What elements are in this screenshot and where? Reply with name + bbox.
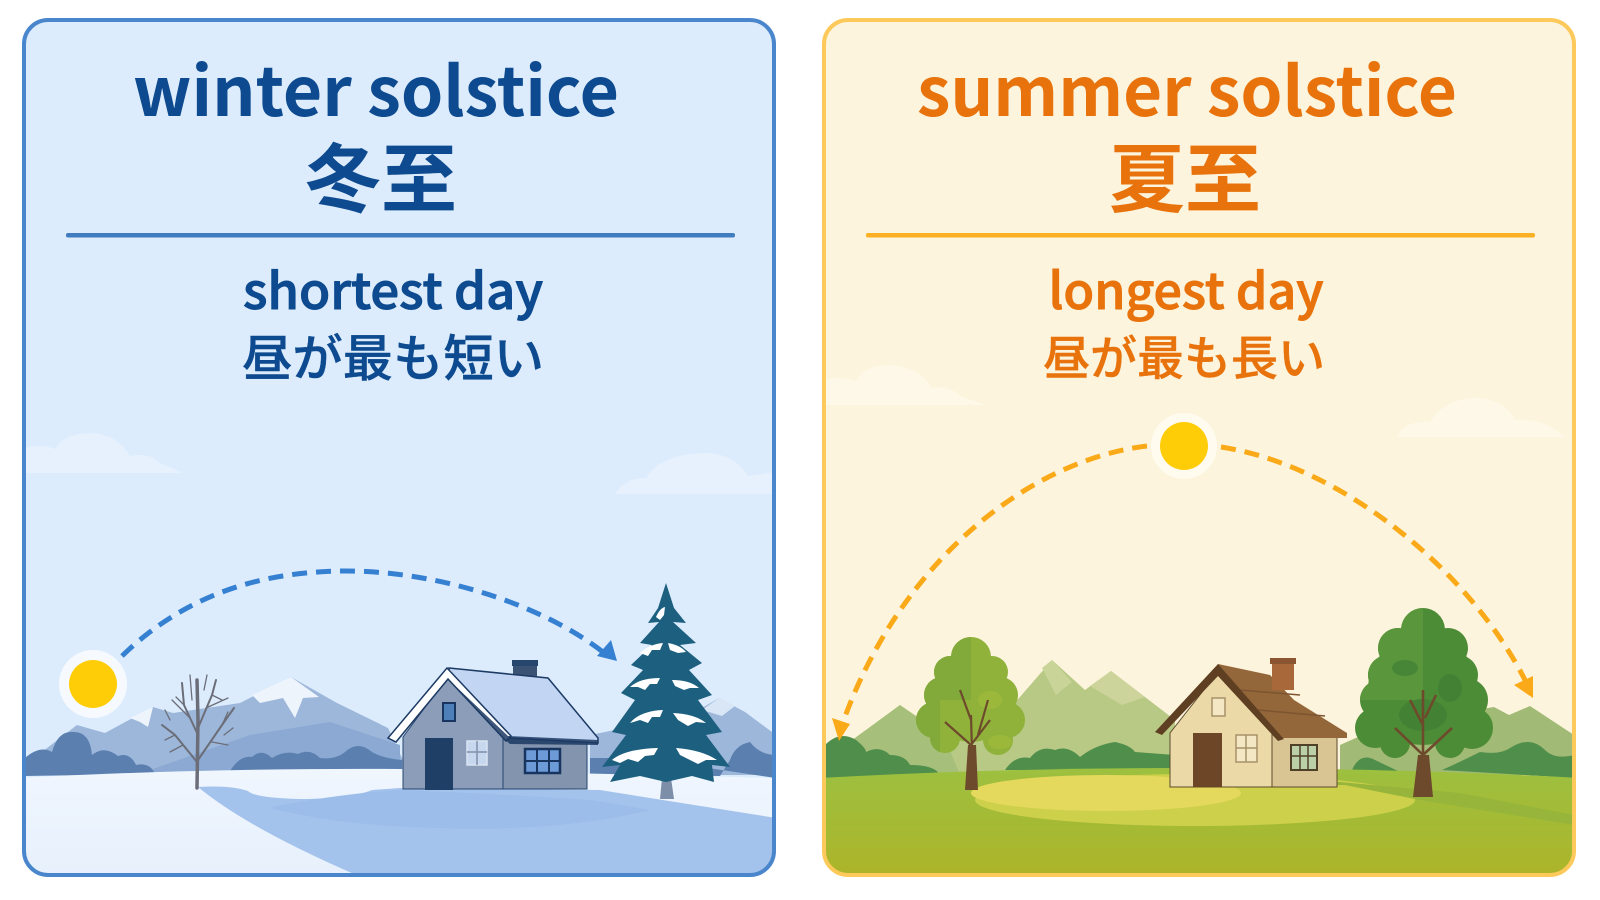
snow ground <box>20 769 776 880</box>
cloud right <box>1397 398 1565 437</box>
divider <box>866 233 1535 238</box>
title english: summer solstice <box>917 37 1457 136</box>
subtitle japanese: 昼が最も長い <box>1043 320 1325 389</box>
long blue shadow <box>198 786 776 880</box>
house <box>388 660 598 790</box>
tree left <box>916 637 1025 790</box>
title english: winter solstice <box>133 37 619 136</box>
grass <box>820 768 1580 880</box>
bushes <box>25 732 776 778</box>
dashed sun path right arrow <box>1221 447 1533 698</box>
tree right <box>1355 608 1493 797</box>
panel border <box>24 20 774 875</box>
divider <box>66 233 735 238</box>
dashed sun path left arrow <box>832 446 1147 741</box>
title japanese: 夏至 <box>1109 119 1261 228</box>
sunlit ellipse <box>975 774 1415 826</box>
title japanese: 冬至 <box>305 119 457 228</box>
cloud left <box>25 433 183 473</box>
panel background <box>24 20 774 875</box>
mountains <box>25 677 776 775</box>
cloud left <box>825 365 986 405</box>
winter scene <box>20 433 776 880</box>
house shadow <box>1338 782 1572 824</box>
subtitle english: longest day <box>1048 252 1324 324</box>
panel: summer solstice <box>820 20 1580 880</box>
subtitle english: shortest day <box>243 252 543 324</box>
panel background <box>824 20 1574 875</box>
dashed sun path arrow <box>122 571 617 661</box>
sun <box>59 650 127 718</box>
mountains <box>825 660 1574 775</box>
summer scene <box>820 365 1580 880</box>
bushes <box>825 736 1574 778</box>
subtitle japanese: 昼が最も短い <box>242 319 544 391</box>
pine tree <box>602 583 730 799</box>
bare tree <box>162 675 234 788</box>
panel border <box>824 20 1574 875</box>
cloud right <box>615 453 774 494</box>
house <box>1155 658 1347 787</box>
darker ground band <box>278 790 630 827</box>
sun <box>1151 413 1217 479</box>
panel: winter solstice <box>20 20 776 880</box>
